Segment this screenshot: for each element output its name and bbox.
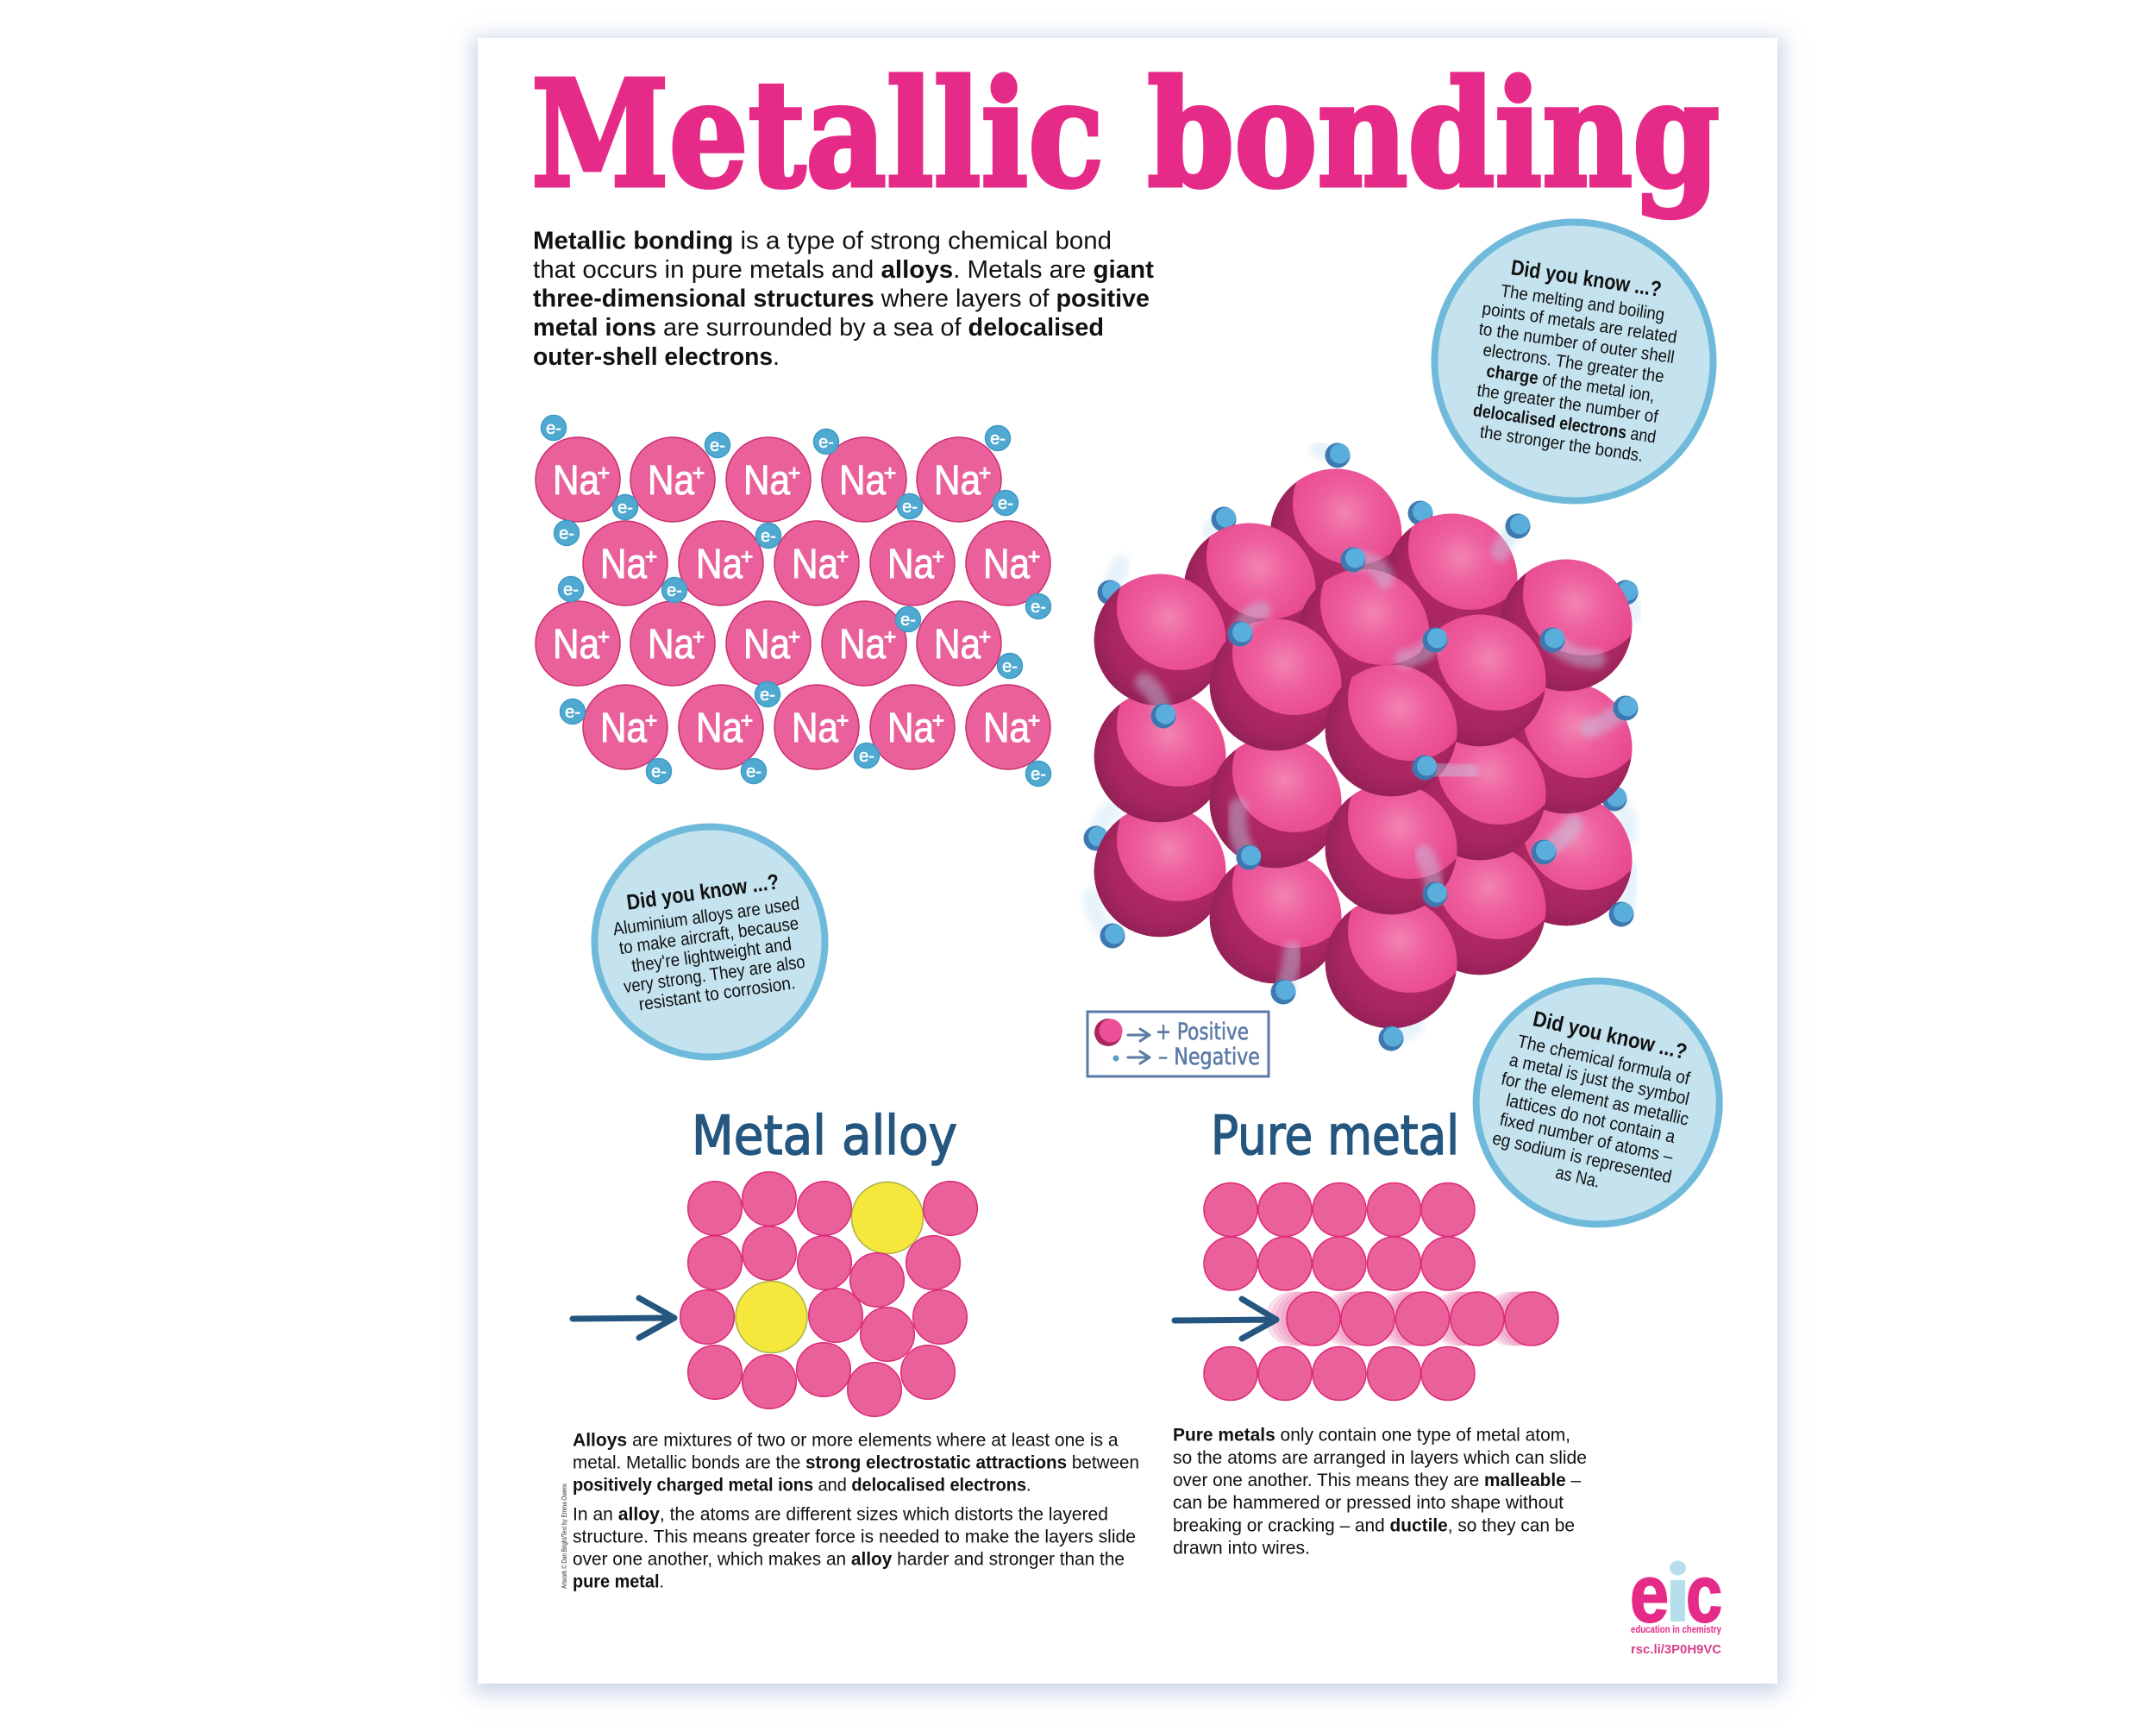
ion row 2: Na (696, 542, 743, 587)
callout: did you know, melting points: electrons. The greater the (1482, 340, 1665, 386)
callout: did you know, chemical formula: The chemical formula of (1515, 1032, 1692, 1089)
text block: alloys: In an alloy, the atoms are different sizes which distorts the layered (573, 1505, 1108, 1525)
ion row 2: Na (792, 542, 838, 587)
delocalised electrons: e- (667, 581, 682, 600)
text block: pure metals (1173, 1426, 1587, 1559)
callout: did you know, chemical formula: fixed number of atoms – (1498, 1109, 1675, 1167)
callout: did you know, melting points: delocalised electrons and (1472, 400, 1658, 447)
callout: did you know, aluminium alloys: Did you know ...? (625, 869, 780, 915)
ion row 1: Na (743, 458, 790, 504)
ion row 2: Na (887, 542, 934, 587)
intro text block: Metallic bonding is a type of strong chemical bond (533, 228, 1112, 255)
callout: did you know, melting points: to the number of outer shell (1477, 319, 1676, 367)
callout: did you know, melting points (1415, 203, 1733, 520)
intro text block: outer-shell electrons. (533, 343, 780, 371)
arrow: force on alloy (573, 1298, 674, 1338)
text block: alloys: pure metal. (573, 1572, 664, 1592)
ion row 1: + (978, 460, 992, 486)
artwork credit: Artwork © Dan Bright/Text by Emma Owens (561, 1484, 568, 1589)
ion row 2: + (1027, 543, 1041, 569)
alloy atom diagram (680, 1172, 977, 1416)
delocalised electrons: e- (900, 611, 916, 630)
delocalised electrons: e- (546, 419, 561, 438)
electron motion trails (1144, 526, 1626, 992)
text block: alloys: Alloys are mixtures of two or more elements where at least one is a (573, 1431, 1119, 1451)
delocalised electrons: e- (818, 433, 834, 452)
ion row 4: + (836, 707, 849, 733)
delocalised electrons: e- (1002, 657, 1018, 676)
delocalised electrons: e- (1031, 765, 1046, 784)
ion row 4: Na (600, 706, 647, 751)
callout: did you know, chemical formula (1453, 957, 1743, 1248)
legend: + Positive (1156, 1019, 1249, 1045)
callout: did you know, aluminium alloys: resistant to corrosion. (637, 973, 797, 1014)
ion row 4: Na (792, 706, 838, 751)
text block: pure metals: so the atoms are arranged in layers which can slide (1173, 1448, 1587, 1468)
delocalised electrons: e- (990, 430, 1006, 448)
positive ion spheres (1094, 441, 1647, 1028)
text block: pure metals: can be hammered or pressed into shape without (1173, 1493, 1564, 1513)
sliding layer motion ghosts (1266, 1292, 1553, 1346)
delocalised electrons: e- (998, 494, 1013, 513)
ion row 4: + (740, 707, 754, 733)
callout: did you know, melting points: points of metals are related (1481, 298, 1678, 348)
callout: did you know, aluminium alloys: Aluminium alloys are used (611, 894, 800, 939)
text block: pure metals: drawn into wires. (1173, 1539, 1310, 1559)
ion row 2: + (931, 543, 945, 569)
text block: pure metals: Pure metals only contain one type of metal atom, (1173, 1426, 1570, 1446)
callout: did you know, chemical formula: eg sodium is represented (1490, 1128, 1673, 1188)
ion row 2: Na (600, 542, 647, 587)
delocalised electrons: e- (651, 762, 667, 781)
text block: alloys: over one another, which makes an alloy harder and stronger than the (573, 1549, 1125, 1569)
ion row 2: + (836, 543, 849, 569)
arrow: force on pure metal (1175, 1299, 1276, 1339)
ion row 1: + (692, 460, 705, 486)
pale glows behind outer electrons (1092, 448, 1634, 1038)
delocalised electrons: e- (559, 524, 574, 543)
3D metal lattice illustration (1083, 441, 1647, 1051)
logo: education in chemistry: e (1630, 1548, 1669, 1639)
legend: – Negative (1158, 1044, 1260, 1070)
electrons in front (1100, 443, 1639, 1051)
ion row 3: + (883, 624, 897, 649)
delocalised electrons: e- (617, 499, 633, 518)
logo: education in chemistry: c (1686, 1548, 1722, 1639)
delocalised electrons: e- (746, 762, 761, 781)
ion row 3: Na (743, 622, 790, 668)
delocalised electrons: e- (565, 703, 580, 722)
intro text block: that occurs in pure metals and alloys. Metals are giant (533, 256, 1154, 284)
ion row 4: Na (887, 706, 934, 751)
callout: did you know, chemical formula: lattices do not contain a (1504, 1090, 1677, 1147)
ion row 4: Na (983, 706, 1030, 751)
delocalised electrons (542, 416, 1050, 787)
delocalised electrons: e- (902, 498, 918, 517)
logo: education in chemistry: education in chemistry (1631, 1623, 1721, 1635)
intro text block: metal ions are surrounded by a sea of delocalised (533, 314, 1104, 342)
delocalised electrons: e- (563, 580, 579, 599)
text block: pure metals: breaking or cracking – and ductile, so they can be (1173, 1516, 1575, 1536)
ion row 1: Na (648, 458, 694, 504)
heading: pure metal: Pure metal (1211, 1104, 1459, 1167)
delocalised electrons: e- (859, 747, 874, 766)
text block: pure metals: over one another. This means they are malleable – (1173, 1471, 1581, 1490)
ion row 1: Na (839, 458, 886, 504)
ion row 3: Na (839, 622, 886, 668)
pure metal atom diagram (1204, 1183, 1558, 1401)
intro text block: three-dimensional structures where layers of positive (533, 285, 1150, 312)
ion row 2 (583, 521, 1050, 605)
ion row 1: Na (934, 458, 981, 504)
ion row 3: + (787, 624, 801, 649)
ion row 4: + (644, 707, 658, 733)
delocalised electrons: e- (761, 527, 776, 546)
delocalised electrons: e- (710, 436, 725, 455)
logo: education in chemistry: rsc.li/3P0H9VC (1631, 1642, 1721, 1657)
ion row 4: Na (696, 706, 743, 751)
callout: did you know, chemical formula: as Na. (1554, 1163, 1601, 1192)
callout: did you know, melting points: charge of the metal ion, (1485, 361, 1656, 406)
ion row 4 (583, 685, 1050, 769)
ion row 3: + (597, 624, 611, 649)
ion row 1: + (883, 460, 897, 486)
text block: alloys: structure. This means greater force is needed to make the layers slide (573, 1527, 1136, 1546)
callout: did you know, melting points: the greater the number of (1476, 380, 1659, 427)
callout: did you know, aluminium alloys: to make aircraft, because (617, 913, 800, 958)
logo: education in chemistry (1630, 1548, 1722, 1657)
ion row 1: Na (553, 458, 599, 504)
ion row 3: Na (934, 622, 981, 668)
sodium ion lattice diagram (536, 416, 1050, 787)
ion row 3 (536, 601, 1001, 686)
ion row 2: + (644, 543, 658, 569)
callout: did you know, aluminium alloys: very strong. They are also (623, 952, 806, 997)
ion row 1: + (597, 460, 611, 486)
delocalised electrons: e- (760, 686, 775, 705)
callout: did you know, chemical formula: for the element as metallic (1500, 1069, 1690, 1130)
ion row 4: + (1027, 707, 1041, 733)
callout: did you know, aluminium alloys (580, 812, 840, 1072)
title: Metallic bonding (531, 48, 1720, 221)
legend (1087, 1012, 1269, 1076)
callout: did you know, chemical formula: Did you know ...? (1531, 1007, 1689, 1064)
intro text block (533, 228, 1154, 371)
text block: alloys: positively charged metal ions and delocalised electrons. (573, 1476, 1031, 1496)
ion row 1: + (787, 460, 801, 486)
callout: did you know, melting points: The melting and boiling (1499, 281, 1666, 325)
ion row 3: Na (648, 622, 694, 668)
ion row 2: + (740, 543, 754, 569)
callout: did you know, melting points: Did you know ...? (1509, 255, 1663, 302)
callout: did you know, chemical formula: a metal is just the symbol (1507, 1051, 1691, 1109)
electrons behind spheres (1083, 500, 1639, 850)
ion row 3: + (978, 624, 992, 649)
ion row 1 (536, 437, 1001, 522)
ion row 3: Na (553, 622, 599, 668)
ion row 4: + (931, 707, 945, 733)
callout: did you know, aluminium alloys: they're lightweight and (630, 934, 793, 976)
callout: did you know, melting points: the stronger the bonds. (1479, 422, 1645, 466)
text block: alloys: metal. Metallic bonds are the strong electrostatic attractions between (573, 1453, 1139, 1473)
delocalised electrons: e- (1031, 598, 1046, 617)
ion row 2: Na (983, 542, 1030, 587)
heading: metal alloy: Metal alloy (692, 1104, 957, 1167)
ion row 3: + (692, 624, 705, 649)
text block: alloys (573, 1431, 1139, 1592)
paper sheet (478, 38, 1777, 1684)
